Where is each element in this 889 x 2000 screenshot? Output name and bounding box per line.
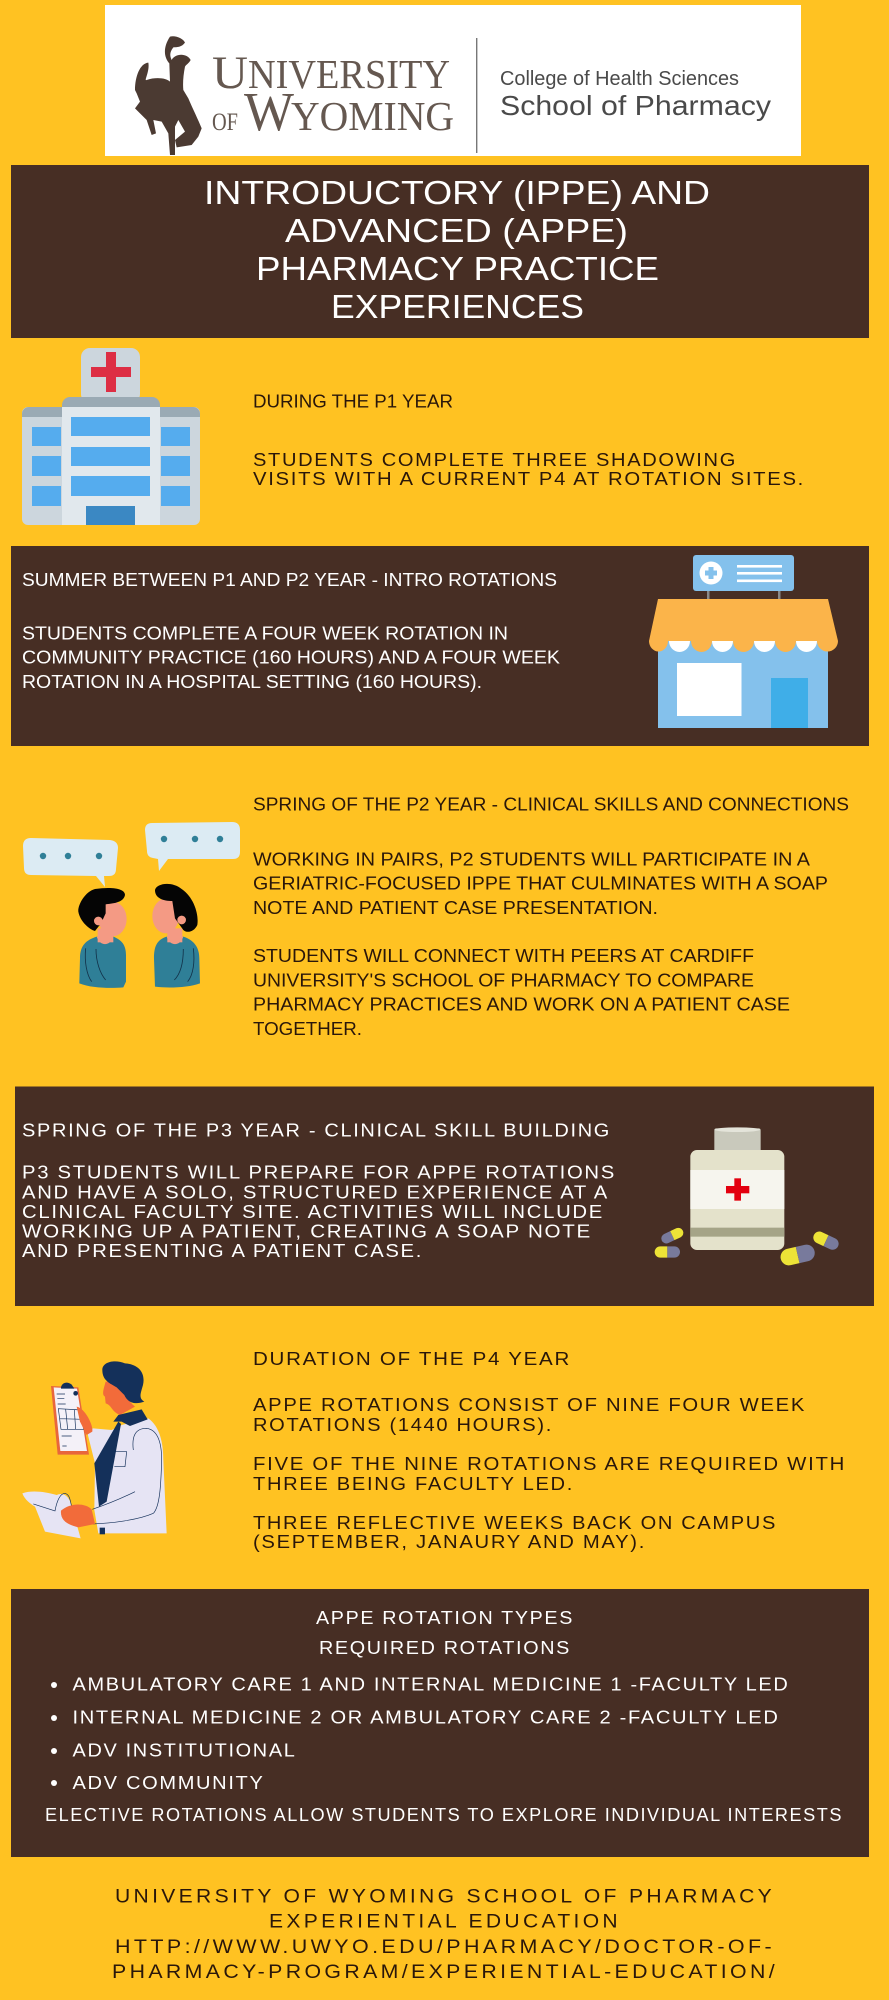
summer rotations text: ROTATION IN A HOSPITAL SETTING (160 HOURS). [22,672,482,692]
college and school names: School of Pharmacy [500,90,771,121]
section: spring of the P2 year: GERIATRIC-FOCUSED IPPE THAT CULMINATES WITH A SOAP [253,874,828,894]
icon: hospital [22,348,200,525]
required rotations list: ADV COMMUNITY [72,1773,264,1793]
college and school names [500,68,771,121]
section: spring of the P2 year: PHARMACY PRACTICES AND WORK ON A PATIENT CASE [253,994,790,1014]
section: duration of the P4 year: APPE ROTATIONS CONSIST OF NINE FOUR WEEK [253,1395,806,1415]
P3 text: P3 STUDENTS WILL PREPARE FOR APPE ROTATIONS [22,1162,616,1182]
section: duration of the P4 year: (SEPTEMBER, JANAURY AND MAY). [253,1532,646,1552]
person right [152,884,200,987]
section: spring of the P2 year: SPRING OF THE P2 YEAR - CLINICAL SKILLS AND CONNECTIONS [253,794,849,814]
university wordmark: YOMING [291,93,454,139]
required rotations list: AMBULATORY CARE 1 AND INTERNAL MEDICINE 1 -FACULTY LED [72,1675,790,1695]
section: spring of the P2 year: UNIVERSITY'S SCHOOL OF PHARMACY TO COMPARE [253,970,754,990]
college and school names: College of Health Sciences [500,68,739,90]
footer: EXPERIENTIAL EDUCATION [269,1912,621,1933]
section: spring of the P2 year: STUDENTS WILL CONNECT WITH PEERS AT CARDIFF [253,946,754,966]
footer: HTTP://WWW.UWYO.EDU/PHARMACY/DOCTOR-OF- [115,1937,775,1958]
university wordmark: U [212,47,248,99]
section: during the P1 year [253,392,805,489]
title panel [11,165,869,338]
section: duration of the P4 year: FIVE OF THE NINE ROTATIONS ARE REQUIRED WITH [253,1454,846,1474]
section: duration of the P4 year: DURATION OF THE P4 YEAR [253,1349,571,1369]
icon: pharmacy storefront [649,555,838,728]
speech bubble right [145,822,240,871]
section: duration of the P4 year: ROTATIONS (1440 HOURS). [253,1415,553,1435]
section: spring of the P2 year: WORKING IN PAIRS, P2 STUDENTS WILL PARTICIPATE IN A [253,850,810,870]
panel headings: APPE ROTATION TYPES [316,1608,574,1628]
section: during the P1 year: VISITS WITH A CURRENT P4 AT ROTATION SITES. [253,469,805,489]
section: spring of the P2 year: TOGETHER. [253,1019,362,1039]
required rotations list [51,1675,790,1793]
university wordmark: OF [212,109,238,136]
title: INTRODUCTORY (IPPE) AND [204,175,710,212]
section: duration of the P4 year [253,1349,846,1552]
logo banner [105,5,801,156]
P3 text: WORKING UP A PATIENT, CREATING A SOAP NOTE [22,1222,592,1242]
panel headings [316,1608,574,1658]
title: ADVANCED (APPE) [285,213,628,250]
panel: APPE rotation types [11,1589,869,1857]
section: during the P1 year: DURING THE P1 YEAR [253,392,453,412]
title: PHARMACY PRACTICE [256,251,659,288]
icon: two people talking [23,822,240,988]
footer: PHARMACY-PROGRAM/EXPERIENTIAL-EDUCATION/ [112,1962,778,1983]
panel headings: REQUIRED ROTATIONS [319,1638,571,1658]
university wordmark: NIVERSITY [248,51,450,97]
elective rotations note: ELECTIVE ROTATIONS ALLOW STUDENTS TO EXPLORE INDIVIDUAL INTERESTS [45,1805,843,1825]
university wordmark [212,47,454,142]
summer rotations text [22,570,560,692]
icon: bucking horse and rider [135,36,202,155]
summer rotations text: STUDENTS COMPLETE A FOUR WEEK ROTATION IN [22,624,508,644]
section: duration of the P4 year: THREE BEING FACULTY LED. [253,1474,574,1494]
P3 text: SPRING OF THE P3 YEAR - CLINICAL SKILL BUILDING [22,1120,611,1140]
title [204,175,710,326]
panel: summer intro rotations [11,546,869,746]
footer: UNIVERSITY OF WYOMING SCHOOL OF PHARMACY [115,1887,775,1908]
P3 text [22,1120,616,1261]
person left [78,888,127,988]
title: EXPERIENCES [331,289,584,326]
icon: pharmacist reading a chart [22,1361,167,1538]
required rotations list: INTERNAL MEDICINE 2 OR AMBULATORY CARE 2 -FACULTY LED [72,1708,780,1728]
required rotations list: ADV INSTITUTIONAL [72,1741,296,1761]
P3 text: CLINICAL FACULTY SITE. ACTIVITIES WILL INCLUDE [22,1202,604,1222]
P3 text: AND HAVE A SOLO, STRUCTURED EXPERIENCE AT A [22,1182,609,1202]
speech bubble left [23,838,118,887]
summer rotations text: SUMMER BETWEEN P1 AND P2 YEAR - INTRO ROTATIONS [22,570,557,590]
section: during the P1 year: STUDENTS COMPLETE THREE SHADOWING [253,450,737,470]
section: duration of the P4 year: THREE REFLECTIVE WEEKS BACK ON CAMPUS [253,1513,777,1533]
section: spring of the P2 year [253,794,849,1039]
section: spring of the P2 year: NOTE AND PATIENT CASE PRESENTATION. [253,898,658,918]
P3 text: AND PRESENTING A PATIENT CASE. [22,1241,423,1261]
summer rotations text: COMMUNITY PRACTICE (160 HOURS) AND A FOUR WEEK [22,648,560,668]
footer [112,1887,778,1983]
icon: medicine bottle and pills [655,1127,841,1267]
university wordmark: W [244,81,294,142]
panel: spring of the P3 year [15,1086,874,1306]
